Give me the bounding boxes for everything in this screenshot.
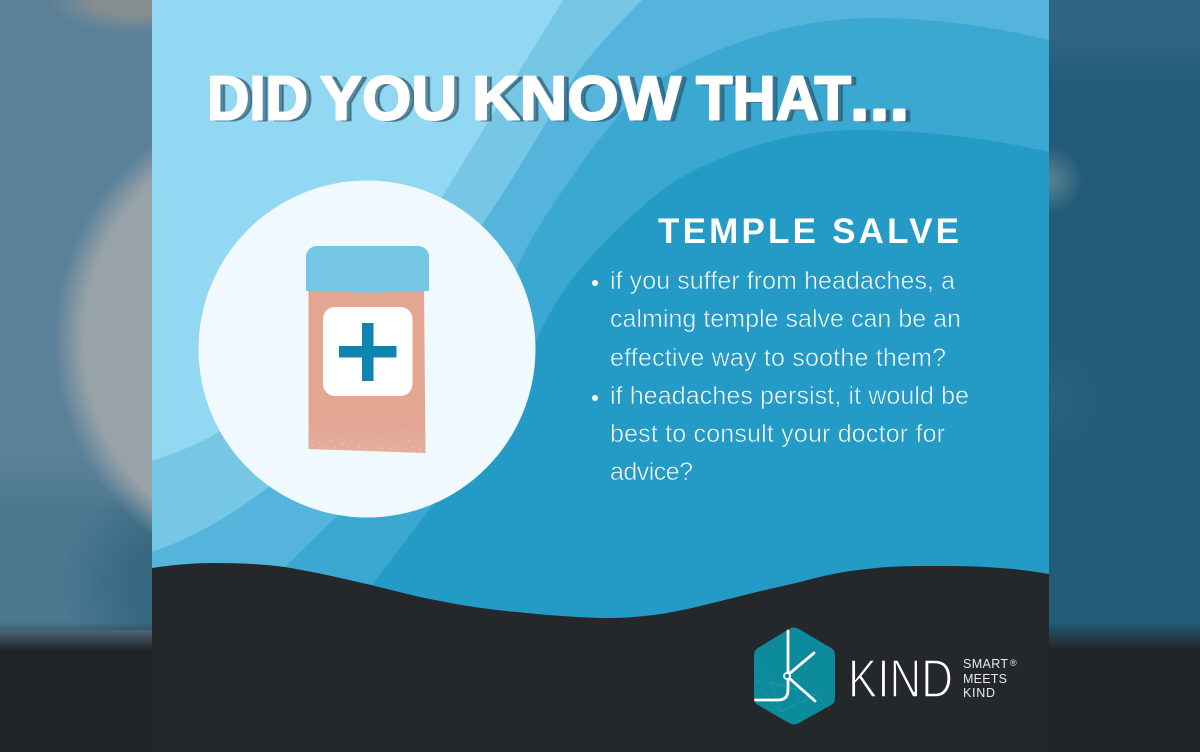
- blurred background: left side: [0, 0, 152, 752]
- logo tagline: [963, 657, 1017, 700]
- bullet 1: calming temple salve can be an: [610, 305, 961, 333]
- bullet 2: advice?: [610, 458, 693, 486]
- logo: [754, 628, 1017, 724]
- bullet 1: [592, 267, 961, 372]
- speckled bottle base: [308, 418, 426, 453]
- bullet 1: effective way to soothe them?: [610, 344, 946, 372]
- bottle lid: [306, 246, 429, 292]
- logo tagline: MEETS: [963, 672, 1007, 686]
- icon circle: [198, 180, 536, 518]
- bullet 2: [592, 382, 969, 486]
- title shadow: KNOW: [477, 66, 687, 134]
- plus sign: [339, 323, 396, 381]
- logo wordmark: KIND: [848, 649, 953, 709]
- title text: KNOW: [472, 64, 682, 134]
- title text: THAT: [696, 64, 851, 134]
- logo tagline: SMART: [963, 657, 1008, 671]
- icon: medicine bottle: [306, 246, 429, 453]
- title: [207, 64, 913, 134]
- title shadow: DID: [212, 66, 313, 134]
- heading: temple salve: TEMPLE SALVE: [658, 212, 959, 251]
- logo tagline: KIND: [963, 686, 995, 700]
- bottle label: [323, 307, 412, 396]
- bullet 2: if headaches persist, it would be: [610, 382, 969, 410]
- panel: wave background: [152, 0, 1049, 752]
- title text: ...: [851, 64, 908, 134]
- title shadow: [212, 66, 913, 134]
- logo tagline: ®: [1010, 658, 1017, 668]
- title shadow: THAT: [701, 66, 856, 134]
- title shadow: ...: [856, 66, 913, 134]
- title text: [207, 64, 908, 134]
- title text: DID: [207, 64, 308, 134]
- title shadow: YOU: [325, 66, 462, 134]
- bullet 1: if you suffer from headaches, a: [610, 267, 955, 295]
- blurred background: right side: [1049, 0, 1200, 752]
- bullet 2: best to consult your doctor for: [610, 420, 945, 448]
- title text: YOU: [320, 64, 457, 134]
- logo hexagon mark: [754, 628, 835, 724]
- bottle body: [308, 288, 426, 453]
- bullet list: [592, 267, 969, 486]
- dark footer wave: [152, 563, 1049, 752]
